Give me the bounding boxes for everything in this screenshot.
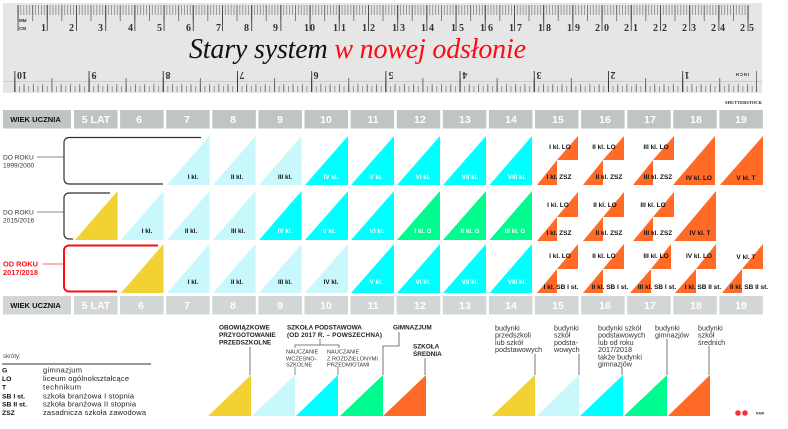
ruler centimetre numbers: MM — [19, 18, 27, 23]
age 7: II kl.: II kl. — [185, 228, 197, 235]
top age header row: 13 — [459, 114, 471, 126]
ruler centimetre numbers — [19, 18, 754, 34]
top age header row: 19 — [735, 114, 747, 126]
ruler centimetre numbers: 2 — [662, 23, 667, 34]
bottom age header row: 16 — [599, 300, 611, 312]
age 18: IV kl. LO and I kl. SB II st.: I kl. SB II st. — [685, 284, 721, 291]
legend: abbreviations: liceum ogólnokształcące — [43, 374, 129, 383]
ruler centimetre numbers: 2 — [624, 23, 629, 34]
legend: abbreviations: skróty: — [3, 354, 21, 360]
row label: do roku 1999/2000: DO ROKU — [3, 154, 34, 162]
age 15: I kl. LO and ZSZ — [537, 192, 578, 241]
key triangle: subject teaching: Z ROZDZIELONYMI — [327, 356, 378, 362]
age 12: VI kl.: VI kl. — [416, 174, 431, 181]
age 10: IV kl.: IV kl. — [324, 174, 339, 181]
age 12: VI kl.: VI kl. — [416, 279, 431, 286]
buildings: secondary schools — [668, 324, 725, 416]
ruler centimetre numbers: 1 — [362, 23, 367, 34]
buildings: preschools or primary schools: lub szkół — [495, 338, 523, 347]
age 7: I kl.: I kl. — [188, 279, 199, 286]
ruler inch numbers, upside down: 8 — [166, 69, 170, 80]
bottom age header row: 11 — [367, 300, 379, 312]
age 13: VII kl.: VII kl. — [462, 279, 478, 286]
age 9: IV kl. — [259, 191, 302, 240]
age 19: V kl. T: V kl. T — [736, 175, 756, 182]
top age header row: 15 — [552, 114, 564, 126]
bottom age header row: 18 — [690, 300, 702, 312]
key triangle: secondary school: ŚREDNIA — [413, 349, 442, 358]
age 11: V kl. — [351, 136, 394, 185]
ruler centimetre numbers: 3 — [691, 23, 696, 34]
ruler inch numbers, upside down: 5 — [388, 69, 394, 80]
buildings: primary and former gymnasium: budynki szkół — [598, 324, 642, 332]
ruler centimetre numbers: 1 — [421, 23, 426, 34]
ruler centimetre numbers: CM — [19, 26, 26, 31]
top age header row: 6 — [136, 114, 142, 126]
key triangle: early education: WCZESNO- — [286, 356, 317, 362]
age 11: VI kl.: VI kl. — [370, 228, 385, 235]
top age header row: 8 — [230, 114, 236, 126]
age 13: II kl. G — [443, 191, 486, 240]
key triangle: compulsory preschool — [208, 324, 276, 416]
age 19: V kl. T and II kl. SB II st.: II kl. SB II st. — [730, 284, 768, 291]
key triangle: compulsory preschool: OBOWIĄZKOWE — [219, 324, 271, 332]
age 11: V kl. — [351, 244, 394, 293]
ruler centimetre numbers: 0 — [604, 23, 609, 34]
age 6: I kl.: I kl. — [142, 228, 153, 235]
buildings: primary and former gymnasium — [580, 324, 645, 416]
row label: od roku 2017/2018 — [3, 246, 158, 292]
legend: abbreviations: SB II st. — [2, 402, 27, 408]
ruler centimetre numbers: 4 — [429, 23, 434, 34]
age 8: III kl.: III kl. — [231, 228, 245, 235]
ruler centimetre numbers: 2 — [370, 23, 375, 34]
age 19: V kl. T — [720, 136, 763, 185]
key: school buildings — [492, 324, 725, 416]
age 18: IV kl. LO — [673, 136, 715, 185]
ruler centimetre numbers: 1 — [567, 23, 572, 34]
buildings: gymnasiums: gimnazjów — [655, 331, 690, 340]
age 17: III kl. LO and ZSZ: III kl. ZSZ — [644, 230, 672, 237]
top age header row: WIEK UCZNIA — [10, 115, 61, 124]
bottom age header row: 19 — [735, 300, 747, 312]
key triangle: compulsory preschool: PRZYGOTOWANIE — [219, 332, 276, 339]
age 17: III kl. LO and ZSZ — [633, 192, 674, 241]
age 18: IV kl. T — [674, 191, 716, 241]
ruler centimetre numbers: 1 — [341, 23, 346, 34]
ruler inch numbers, upside down: 3 — [536, 69, 542, 80]
age 13: VII kl. — [443, 244, 486, 293]
ruler centimetre numbers: 1 — [41, 23, 46, 34]
legend: abbreviations: T — [2, 384, 7, 392]
ruler centimetre numbers: 5 — [157, 23, 162, 34]
age 19: V kl. T and II kl. SB II st.: V kl. T — [736, 254, 756, 261]
age 8: II kl. — [213, 136, 256, 185]
age 15: I kl. LO and ZSZ: I kl. ZSZ — [547, 230, 571, 237]
age 8: II kl. — [213, 244, 256, 293]
ruler inch numbers, upside down — [17, 69, 749, 80]
key heading: primary school: (OD 2017 R. – POWSZECHNA) — [287, 332, 382, 339]
buildings: primary schools — [537, 324, 580, 416]
ruler centimetre numbers: 1 — [333, 23, 338, 34]
age 13: VII kl. — [443, 136, 486, 185]
row label: do roku 2015/2016: DO ROKU — [3, 210, 34, 216]
ruler centimetre numbers: 4 — [128, 23, 133, 34]
buildings: secondary schools: szkół — [698, 331, 715, 340]
age 16: II kl. LO and ZSZ: II kl. ZSZ — [596, 174, 622, 181]
age 15: I kl. LO and ZSZ — [537, 136, 578, 185]
age 12: VI kl. — [397, 136, 440, 185]
ruler centimetre numbers: 2 — [711, 23, 716, 34]
top age header row: 10 — [320, 114, 332, 126]
bottom age header row: 12 — [414, 300, 426, 312]
age 17: III kl. LO and ZSZ: III kl. ZSZ — [644, 174, 672, 181]
age 17: III kl. LO and ZSZ — [633, 136, 674, 185]
age 16: II kl. LO and SB I st. — [583, 244, 628, 293]
ruler inch numbers, upside down: 10 — [17, 69, 27, 80]
ruler centimetre numbers: 1 — [304, 23, 309, 34]
ruler centimetre numbers: 3 — [400, 23, 405, 34]
age 17: III kl. LO and ZSZ: III kl. LO — [640, 202, 666, 209]
age 14: III kl. G: III kl. G — [505, 228, 525, 235]
age 11: VI kl. — [351, 191, 394, 240]
top age header row: 5 LAT — [82, 114, 111, 126]
age 9: III kl.: III kl. — [278, 174, 292, 181]
buildings: primary schools: wowych — [553, 345, 580, 354]
buildings: preschools or primary schools — [492, 324, 542, 416]
buildings: primary schools: budynki — [554, 324, 579, 332]
ruler centimetre numbers: 8 — [546, 23, 551, 34]
age 12: I kl. G — [397, 191, 440, 240]
ruler centimetre numbers: 1 — [480, 23, 485, 34]
publisher logo and author initials: RAW — [756, 412, 765, 416]
buildings: primary and former gymnasium: lub od roku — [598, 338, 634, 347]
age 13: II kl. G: II kl. G — [461, 228, 480, 235]
age 17: III kl. LO and SB I st.: III kl. SB I st. — [638, 284, 676, 291]
buildings: primary schools: szkół — [554, 331, 571, 340]
top age header row: 18 — [690, 114, 702, 126]
age 7: II kl. — [167, 191, 210, 240]
age 18: IV kl. LO and I kl. SB II st.: IV kl. LO — [686, 253, 712, 260]
row label: do roku 1999/2000 — [3, 138, 201, 184]
buildings: preschools or primary schools: podstawowych — [495, 345, 542, 354]
key triangle: compulsory preschool: PRZEDSZKOLNE — [219, 340, 272, 346]
buildings: preschools or primary schools: przedszkoli — [495, 331, 531, 340]
buildings: gymnasiums — [624, 324, 690, 416]
ruler centimetre numbers: 2 — [682, 23, 687, 34]
age 15: I kl. LO and ZSZ: I kl. LO — [549, 144, 571, 151]
age 10: IV kl. — [305, 136, 348, 185]
key triangle: subject teaching: PRZEDMIOTAMI — [327, 362, 370, 368]
key triangle: secondary school: SZKOŁA — [413, 344, 440, 350]
key triangle: early education: SZKOLNE — [286, 362, 312, 368]
legend: abbreviations: szkoła branżowa II stopnia — [43, 400, 137, 408]
top age header row: 12 — [414, 114, 426, 126]
buildings: preschools or primary schools: budynki — [495, 324, 520, 332]
age 7: I kl. — [167, 136, 210, 185]
ruler centimetre numbers: 1 — [633, 23, 638, 34]
age 15: I kl. LO and SB I st. — [537, 244, 579, 293]
age 9: III kl. — [259, 136, 302, 185]
top age header row: 17 — [644, 114, 656, 126]
row label: od roku 2017/2018: 2017/2018 — [3, 268, 38, 277]
ruler centimetre numbers: 6 — [488, 23, 493, 34]
age 13: VII kl.: VII kl. — [462, 174, 478, 181]
top age header row: 16 — [599, 114, 611, 126]
age 9: III kl.: III kl. — [278, 279, 292, 286]
bottom age header row: 8 — [230, 300, 236, 312]
photo credit: SHUTTERSTOCK — [725, 101, 762, 105]
ruler centimetre numbers: 1 — [509, 23, 514, 34]
row label: do roku 1999/2000: 1999/2000 — [3, 162, 35, 170]
legend: abbreviations: gimnazjum — [43, 366, 82, 374]
age 9: III kl. — [259, 244, 302, 293]
row label: do roku 2015/2016: 2015/2016 — [3, 218, 35, 224]
ruler centimetre numbers: 5 — [749, 23, 754, 34]
age 19: V kl. T and II kl. SB II st. — [722, 244, 768, 293]
ruler centimetre numbers: 1 — [538, 23, 543, 34]
ruler centimetre numbers: 1 — [451, 23, 456, 34]
age 10: V kl. — [305, 191, 348, 240]
ruler inch numbers, upside down: 4 — [462, 69, 468, 80]
ruler centimetre numbers: 7 — [216, 23, 221, 34]
ruler inch numbers, upside down: 1 — [684, 69, 690, 80]
top age header row: 9 — [277, 114, 283, 126]
age 16: II kl. LO and ZSZ: II kl. LO — [593, 202, 617, 209]
key triangle: early education: NAUCZANIE — [286, 350, 319, 356]
row 3: system from 2017/2018 — [121, 244, 768, 293]
publisher logo and author initials — [735, 410, 765, 416]
ruler centimetre numbers: 2 — [740, 23, 745, 34]
age 14: VIII kl.: VIII kl. — [508, 174, 526, 181]
age 15: I kl. LO and ZSZ: I kl. ZSZ — [547, 174, 571, 181]
age 14: VIII kl. — [490, 136, 532, 185]
buildings: primary and former gymnasium: 2017/2018 — [598, 345, 632, 354]
key triangle: early education — [252, 350, 319, 416]
age 5: preschool — [75, 191, 118, 240]
age 15: I kl. LO and SB I st.: I kl. LO — [549, 253, 571, 260]
buildings: primary and former gymnasium: podstawowych — [598, 331, 645, 340]
bottom age header row: 7 — [184, 300, 190, 312]
title: Stary system w nowej odsłonie — [189, 34, 526, 65]
ruler inch numbers, upside down: 2 — [610, 69, 616, 80]
ruler centimetre numbers: 0 — [310, 23, 315, 34]
top age header row: 14 — [505, 114, 517, 126]
ruler centimetre numbers: 3 — [98, 23, 103, 34]
legend: abbreviations: LO — [2, 376, 11, 383]
top age header row: 11 — [367, 114, 379, 126]
age 7: I kl.: I kl. — [188, 174, 199, 181]
age 12: I kl. G: I kl. G — [414, 228, 432, 235]
legend: abbreviations — [2, 354, 151, 417]
bottom age header row: 17 — [644, 300, 656, 312]
row 1: system to 1999/2000 — [167, 136, 763, 185]
ruler inch numbers, upside down: 6 — [314, 69, 318, 80]
age 14: III kl. G — [490, 191, 532, 240]
buildings: primary schools: podsta- — [554, 338, 579, 347]
age 17: III kl. LO and SB I st. — [630, 244, 676, 293]
age 16: II kl. LO and ZSZ: II kl. LO — [592, 144, 616, 151]
ruler centimetre numbers: 9 — [575, 23, 580, 34]
ruler centimetre numbers: 6 — [186, 23, 191, 34]
ruler with title — [3, 3, 762, 93]
row label: do roku 2015/2016 — [3, 193, 110, 239]
bottom age header row: 9 — [277, 300, 283, 312]
age 16: II kl. LO and ZSZ — [583, 192, 624, 241]
legend: abbreviations: SB I st. — [2, 394, 25, 400]
key triangle: secondary school — [383, 344, 442, 416]
age 17: III kl. LO and ZSZ: III kl. LO — [643, 144, 669, 151]
age 8: II kl.: II kl. — [231, 279, 243, 286]
age 8: II kl.: II kl. — [231, 174, 243, 181]
age 14: VIII kl.: VIII kl. — [508, 279, 526, 286]
age 10: IV kl.: IV kl. — [324, 279, 339, 286]
key triangle: subject teaching: NAUCZANIE — [327, 350, 360, 356]
age 15: I kl. LO and ZSZ: I kl. LO — [547, 202, 569, 209]
age 11: V kl.: V kl. — [370, 174, 383, 181]
ruler centimetre numbers: 2 — [69, 23, 74, 34]
age 16: II kl. LO and ZSZ: II kl. ZSZ — [596, 230, 622, 237]
bottom age header row: 5 LAT — [82, 300, 111, 312]
bottom age header row: 6 — [138, 300, 144, 312]
ruler centimetre numbers: 9 — [273, 23, 278, 34]
ruler centimetre numbers: 1 — [392, 23, 397, 34]
bottom age header row — [3, 296, 763, 314]
age 6: I kl. — [121, 191, 164, 240]
key triangle: gymnasium — [340, 324, 432, 416]
age 18: IV kl. LO and I kl. SB II st. — [675, 244, 721, 293]
age 6: preschool — [121, 244, 164, 293]
buildings: secondary schools: średnich — [698, 338, 725, 347]
ruler inch ticks — [14, 71, 757, 92]
legend: abbreviations: technikum — [43, 382, 81, 392]
ruler centimetre ticks — [17, 5, 750, 31]
key triangle: gymnasium: GIMNAZJUM — [393, 324, 432, 332]
age 10: IV kl. — [305, 244, 348, 293]
legend: abbreviations: G — [2, 368, 7, 374]
age 11: V kl.: V kl. — [370, 279, 383, 286]
age 8: III kl. — [213, 191, 256, 240]
ruler inch numbers, upside down: INCH — [735, 72, 749, 77]
ruler centimetre numbers: 8 — [244, 23, 249, 34]
age 15: I kl. LO and SB I st.: I kl. SB I st. — [544, 284, 579, 291]
age 12: VI kl. — [397, 244, 440, 293]
age 9: IV kl.: IV kl. — [278, 228, 293, 235]
bottom age header row: WIEK UCZNIA — [10, 301, 61, 310]
key: school types — [208, 324, 442, 416]
age 17: III kl. LO and SB I st.: III kl. LO — [643, 253, 669, 260]
age 10: V kl.: V kl. — [323, 228, 336, 235]
ruler centimetre numbers: 2 — [595, 23, 600, 34]
ruler centimetre numbers: 5 — [459, 23, 464, 34]
bottom age header row: 13 — [459, 300, 471, 312]
ruler centimetre numbers: 2 — [653, 23, 658, 34]
age 16: II kl. LO and SB I st.: II kl. SB I st. — [592, 284, 628, 291]
key heading: primary school — [287, 324, 382, 348]
bottom age header row: 10 — [320, 300, 332, 312]
age 14: VIII kl. — [490, 244, 532, 293]
age 16: II kl. LO and ZSZ — [583, 136, 624, 185]
legend: abbreviations: szkoła branżowa I stopnia — [43, 392, 135, 400]
ruler centimetre numbers: 7 — [517, 23, 522, 34]
key heading: primary school: SZKOŁA PODSTAWOWA — [287, 324, 362, 332]
top age header row — [3, 110, 763, 128]
buildings: primary and former gymnasium: także budynki — [598, 352, 642, 361]
key triangle: subject teaching — [296, 350, 378, 416]
legend: abbreviations: zasadnicza szkoła zawodowa — [43, 408, 147, 417]
buildings: secondary schools: budynki — [698, 324, 723, 332]
bottom age header row: 15 — [552, 300, 564, 312]
buildings: primary and former gymnasium: gimnazjów — [598, 360, 633, 368]
age 18: IV kl. T: IV kl. T — [690, 230, 711, 237]
age 16: II kl. LO and SB I st.: II kl. LO — [592, 253, 616, 260]
age 7: I kl. — [167, 244, 210, 293]
legend: abbreviations: ZSZ — [2, 410, 15, 417]
row label: od roku 2017/2018: OD ROKU — [3, 260, 38, 268]
row 2: system to 2015/2016 — [75, 191, 716, 241]
bottom age header row: 14 — [505, 300, 517, 312]
ruler inch numbers, upside down: 7 — [240, 69, 244, 80]
ruler centimetre numbers: 4 — [720, 23, 725, 34]
ruler inch numbers, upside down: 9 — [92, 69, 96, 80]
top age header row: 7 — [184, 114, 190, 126]
age 18: IV kl. LO: IV kl. LO — [686, 175, 712, 182]
buildings: gymnasiums: budynki — [655, 324, 680, 332]
